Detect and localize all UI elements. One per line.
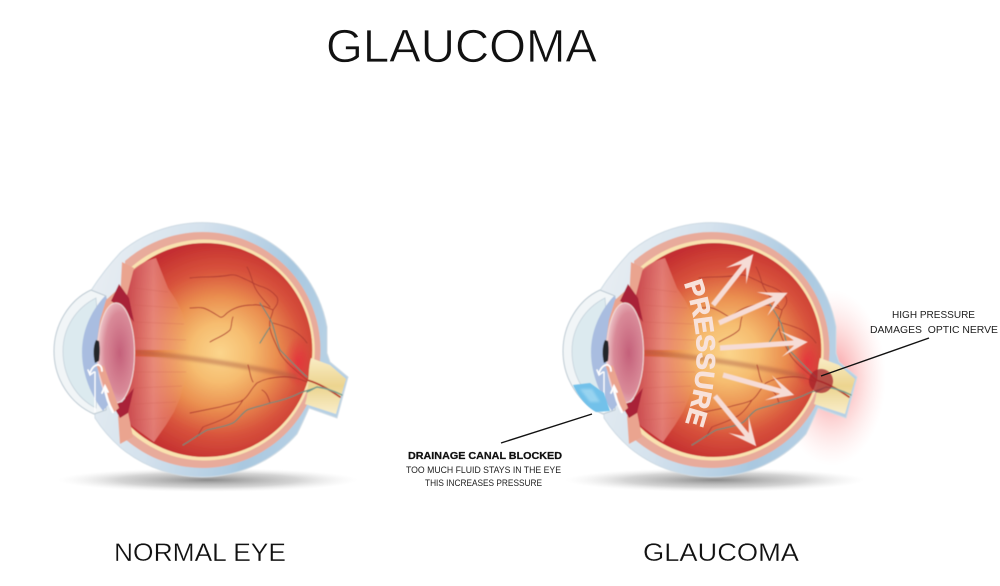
title: GLAUCOMA: [326, 20, 597, 72]
caption: normal eye: NORMAL EYE: [114, 539, 286, 567]
central ray band: [136, 352, 297, 377]
drainage fluid highlights: [580, 389, 600, 402]
aqueous flow arrows: [88, 365, 113, 412]
cornea: [54, 290, 106, 414]
vitreous fold lines: [134, 288, 186, 420]
lens: [98, 303, 134, 403]
ground shadow: glaucoma eye: [565, 468, 865, 492]
ground shadow: normal eye: [58, 468, 358, 492]
ciliary body: [111, 284, 134, 418]
pressure arrows: [703, 246, 809, 454]
arrow up-left: [703, 246, 764, 313]
drainage heading: DRAINAGE CANAL BLOCKED: [408, 451, 562, 462]
arrow right: [719, 329, 809, 361]
anterior chamber: [63, 298, 100, 408]
pupil: [94, 340, 100, 363]
salmon wedges and iris root: [97, 262, 134, 444]
choroid band: [125, 232, 320, 468]
vitreous folds upper: [125, 258, 188, 350]
retinal hot spot near disc: [284, 336, 312, 388]
blocked drainage canal fluid: [573, 383, 610, 412]
leader line: nerve: [821, 338, 929, 376]
iris: [82, 296, 112, 411]
drainage text line 2: THIS INCREASES PRESSURE: [425, 478, 542, 488]
retinal pigment layer: [125, 239, 315, 460]
caption: glaucoma: GLAUCOMA: [643, 539, 799, 567]
retina: [124, 243, 312, 457]
nerve text line 2: DAMAGES OPTIC NERVE: [870, 325, 998, 336]
normal eye illustration: [54, 223, 348, 477]
pressure label: PRESSURE: [684, 278, 716, 428]
vitreous folds lower: [125, 356, 188, 442]
arrow up-right: [714, 281, 793, 335]
damaged optic disc: [809, 369, 833, 393]
nerve vessels: [307, 380, 342, 397]
retinal arteries: [190, 267, 307, 437]
lower iris strip: [96, 364, 119, 413]
drainage text line 1: TOO MUCH FLUID STAYS IN THE EYE: [406, 465, 561, 475]
optic nerve: [305, 358, 346, 414]
glaucoma eye illustration: [562, 222, 858, 478]
red glow behind damaged optic nerve: [778, 290, 886, 466]
callout: optic nerve damage: [821, 310, 998, 376]
arrow down: [705, 388, 766, 454]
callout: drainage canal blocked: [406, 414, 592, 488]
nerve text line 1: HIGH PRESSURE: [892, 310, 975, 321]
sclera and optic nerve sheath outline: [90, 223, 348, 477]
leader line: drainage: [501, 414, 592, 443]
eye base copy: [563, 223, 857, 477]
arrow down-right: [719, 362, 798, 408]
retinal veins: [183, 303, 317, 445]
